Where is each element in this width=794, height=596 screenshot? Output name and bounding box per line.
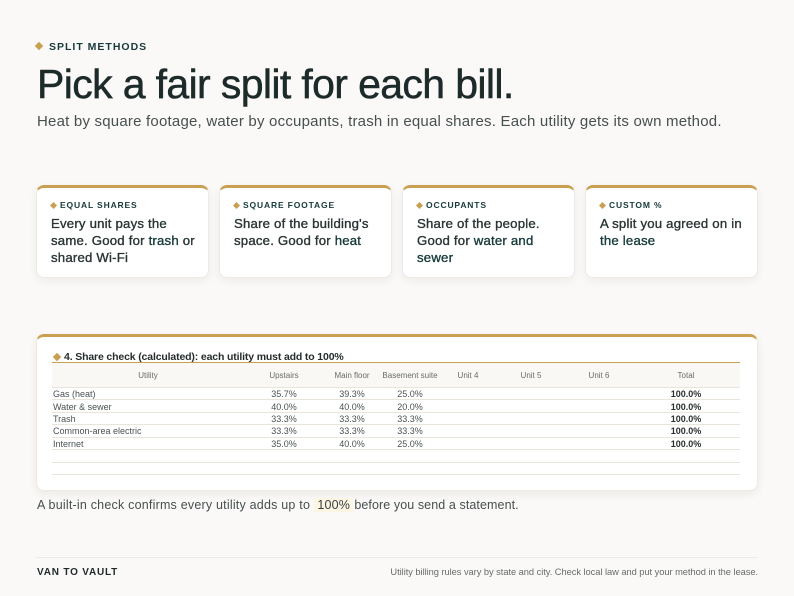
row: water: 40.0% [339, 402, 365, 412]
row: internet: 35.0% [271, 439, 297, 449]
row: gas [53, 389, 701, 399]
row: trash: 33.3% [339, 414, 365, 424]
row: common-area electric: 33.3% [397, 426, 423, 436]
panel: equal shares [36, 185, 209, 278]
panel: occupants: sewer [417, 250, 453, 265]
row: water: Water & sewer [53, 402, 112, 412]
panel: square footage: Share of the building's [234, 216, 369, 231]
row: trash [53, 414, 701, 424]
panel: custom percent: A split you agreed on in [600, 216, 742, 231]
panel: equal shares: EQUAL SHARES [60, 200, 138, 210]
panel: square footage: space. Good for heat [234, 233, 361, 248]
row: gas: 25.0% [397, 389, 423, 399]
footer note: Utility billing rules vary by state and city. Check local law and put your method in the lease. [390, 567, 758, 577]
row: internet: 40.0% [339, 439, 365, 449]
footer brand: VAN TO VAULT [37, 567, 118, 578]
row: trash: Trash [53, 414, 76, 424]
table heading: 4. Share check (calculated): each utility must add to 100% [64, 351, 344, 363]
row: common-area electric: 100.0% [671, 426, 701, 436]
row: gas: 100.0% [671, 389, 701, 399]
eyebrow: split methods: SPLIT METHODS [49, 41, 147, 53]
row: trash: 100.0% [671, 414, 701, 424]
panel: square footage: SQUARE FOOTAGE [243, 200, 335, 210]
row: internet: 25.0% [397, 439, 423, 449]
row: common-area electric: Common-area electric [53, 426, 142, 436]
caption: A built-in check confirms every utility adds up to 100% before you send a statement. [37, 498, 519, 512]
row: water: 20.0% [397, 402, 423, 412]
table header row [52, 363, 740, 387]
table header row: Utility [138, 371, 158, 380]
row: water: 100.0% [671, 402, 701, 412]
row: internet: Internet [53, 439, 84, 449]
table header row: Unit 5 [521, 371, 541, 380]
table header row: Upstairs [269, 371, 299, 380]
row: trash: 33.3% [397, 414, 423, 424]
row: internet [53, 439, 701, 449]
row: trash: 33.3% [271, 414, 297, 424]
table header row: Unit 6 [589, 371, 609, 380]
table header row: Main floor [334, 371, 370, 380]
subtitle: Heat by square footage, water by occupants, trash in equal shares. Each utility gets its own method. [37, 113, 722, 130]
row: common-area electric: 33.3% [271, 426, 297, 436]
table header row: Unit 4 [458, 371, 478, 380]
panel: custom percent: CUSTOM % [609, 200, 662, 210]
title: Pick a fair split for each bill. [37, 61, 514, 107]
row: gas: 39.3% [339, 389, 365, 399]
panel: occupants: Share of the people. [417, 216, 540, 231]
panel: share check table [36, 334, 758, 491]
panel: equal shares: Every unit pays the [51, 216, 167, 231]
table header row: Total [678, 371, 694, 380]
panel: custom percent: the lease [600, 233, 655, 248]
row: gas: Gas (heat) [53, 389, 96, 399]
panel: equal shares: same. Good for trash or [51, 233, 195, 248]
panel: square footage [219, 185, 392, 278]
panel: occupants: OCCUPANTS [426, 200, 487, 210]
row: internet: 100.0% [671, 439, 701, 449]
row: common-area electric: 33.3% [339, 426, 365, 436]
panel: equal shares: shared Wi-Fi [51, 250, 128, 265]
row: gas: 35.7% [271, 389, 297, 399]
row: water: 40.0% [271, 402, 297, 412]
row: water [53, 402, 701, 412]
row: common-area electric [53, 426, 701, 436]
table header row: Basement suite [382, 371, 438, 380]
panel: custom percent [585, 185, 758, 278]
panel: occupants [402, 185, 575, 278]
panel: occupants: Good for water and [417, 233, 534, 248]
